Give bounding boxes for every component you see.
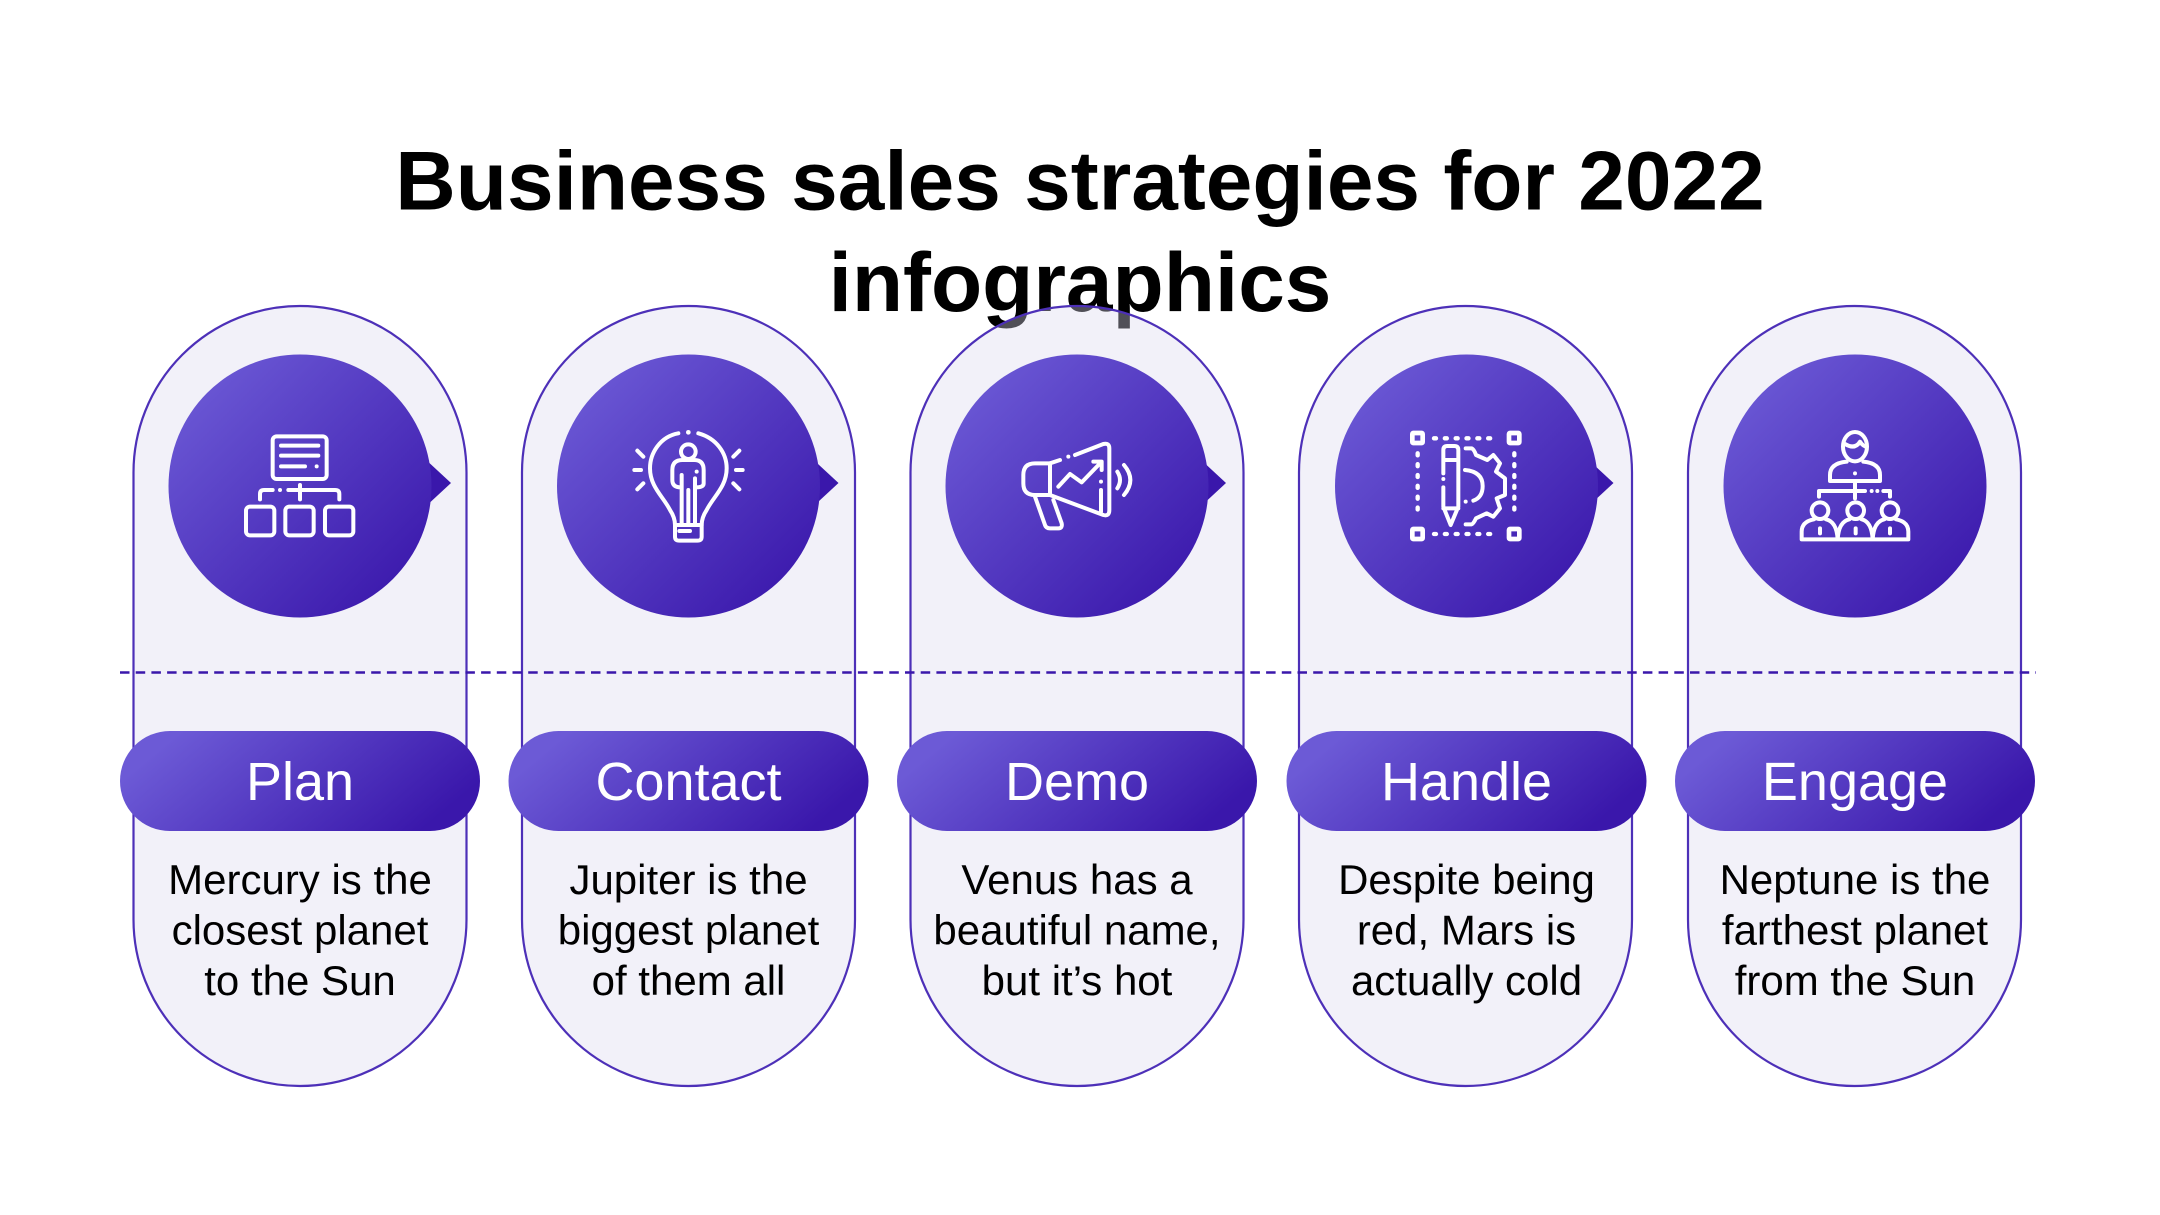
description: Engage: from the Sun (1735, 957, 1975, 1004)
title: Business sales strategies for 2022 (395, 134, 1765, 228)
capsule background: Plan (134, 306, 466, 1086)
description: Plan: closest planet (172, 906, 429, 954)
description: Handle: red, Mars is (1357, 906, 1576, 954)
description: Demo: beautiful name, (933, 906, 1221, 954)
icon circle: Engage (1724, 354, 1986, 618)
icon circle: Contact (557, 354, 820, 618)
description: Demo: Venus has a (961, 856, 1193, 903)
panel: Contact (508, 306, 868, 1086)
capsule background: Engage (1688, 306, 2021, 1086)
icon: organization chart (246, 436, 353, 535)
description: Contact: of them all (592, 957, 785, 1004)
pill label: Plan: Plan (246, 752, 354, 812)
description: Plan: to the Sun (204, 957, 396, 1004)
icon: pencil and gear in selection frame (1412, 433, 1519, 539)
arrow: Demo to Handle (1199, 458, 1226, 508)
arrow: Plan to Contact (424, 458, 451, 508)
pill: Engage (1675, 731, 2035, 831)
description: Contact: biggest planet (558, 906, 820, 954)
icon: megaphone with chart (1023, 444, 1130, 528)
arrow: Contact to Demo (812, 458, 838, 508)
capsule background: Handle (1299, 306, 1632, 1086)
title: infographics (829, 235, 1331, 329)
icon: leader and team hierarchy (1802, 432, 1908, 539)
icon circle: Plan (168, 354, 432, 618)
pill label: Handle: Handle (1381, 752, 1552, 812)
pill: Handle (1286, 731, 1646, 831)
description: Engage: Neptune is the (1720, 856, 1990, 903)
panel: Demo (897, 306, 1257, 1086)
pill label: Engage: Engage (1762, 752, 1948, 812)
description: Plan: Mercury is the (168, 856, 432, 903)
description: Demo: but it’s hot (982, 957, 1173, 1004)
panel: Engage (1675, 306, 2035, 1086)
icon circle: Handle (1335, 354, 1598, 618)
description: Handle: Despite being (1338, 856, 1595, 903)
description: Contact: Jupiter is the (569, 856, 808, 903)
icon circle: Demo (946, 354, 1208, 618)
pill: Demo (897, 731, 1257, 831)
panel: Plan (120, 306, 480, 1086)
arrow: Handle to Engage (1586, 458, 1614, 508)
description: Handle: actually cold (1351, 957, 1582, 1004)
pill: Contact (508, 731, 868, 831)
pill: Plan (120, 731, 480, 831)
pill label: Contact: Contact (595, 752, 782, 812)
capsule background: Contact (522, 306, 855, 1086)
capsule background: Demo (910, 306, 1244, 1086)
title (395, 134, 1765, 329)
description: Engage: farthest planet (1722, 906, 1988, 954)
panel: Handle (1286, 306, 1646, 1086)
pill label: Demo: Demo (1005, 752, 1149, 812)
icon: person in light bulb (634, 430, 743, 541)
